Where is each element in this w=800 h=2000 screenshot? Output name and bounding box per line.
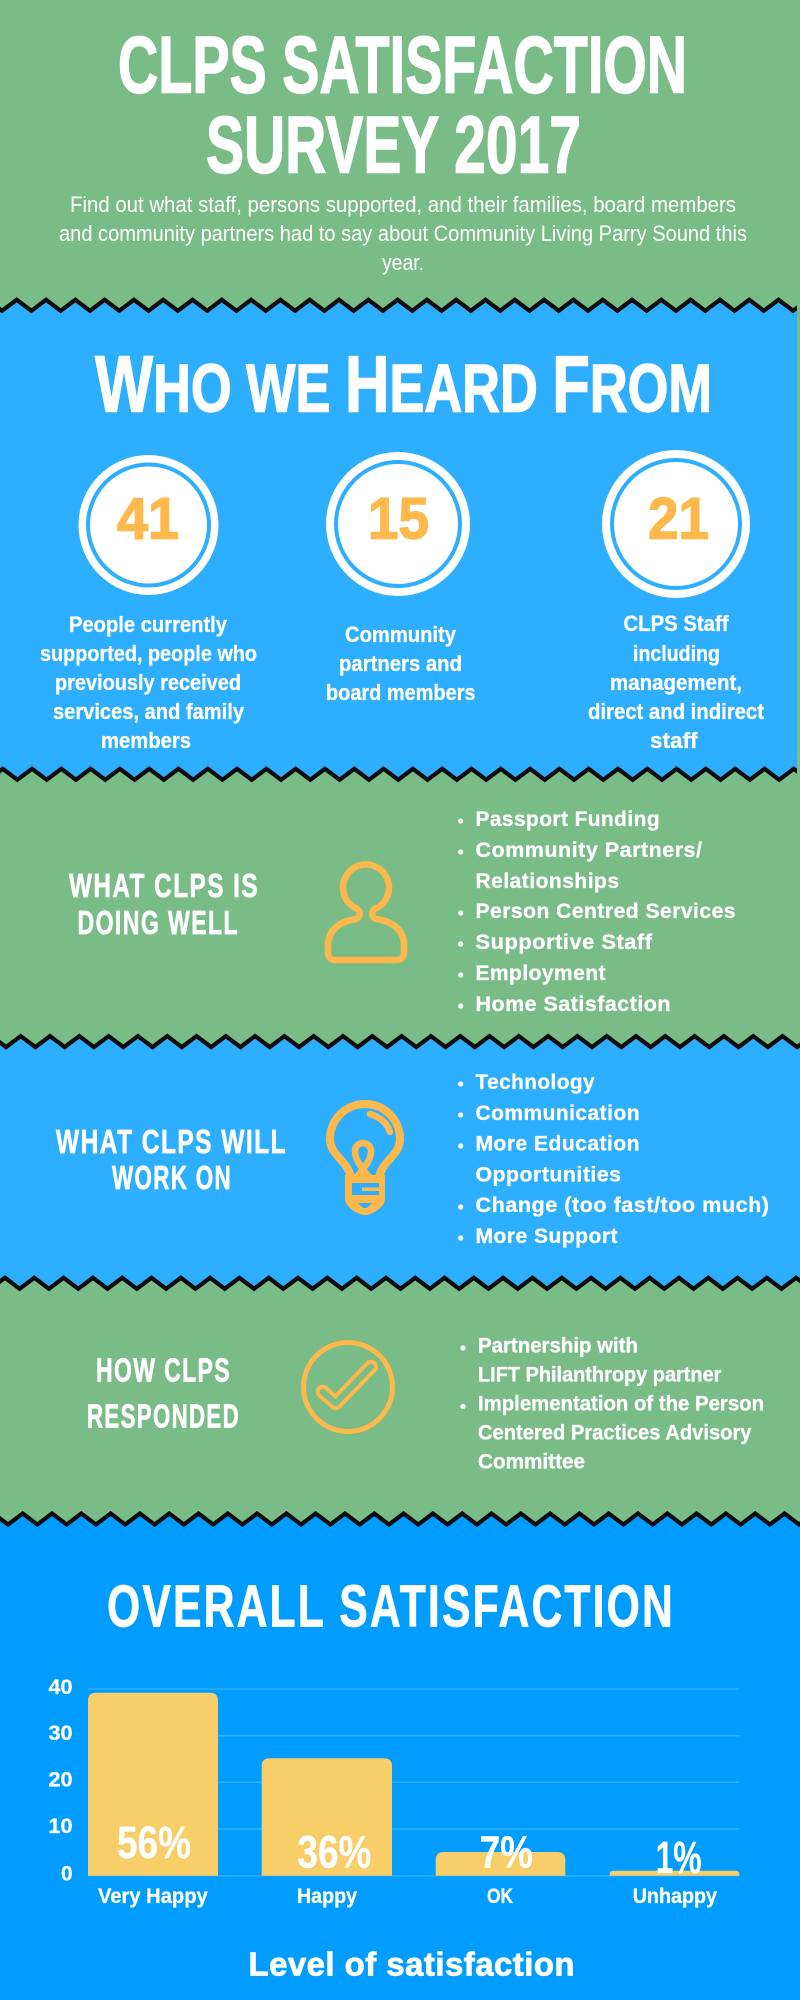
- icon: check mark: [304, 1342, 392, 1432]
- value: 56%: 56%: [117, 1817, 191, 1868]
- heading: how clps responded: RESPONDED: [87, 1398, 240, 1434]
- y axis labels: 0: [61, 1863, 72, 1886]
- stat: 21: 21: [648, 486, 709, 552]
- panel: who we heard from background: [0, 300, 800, 786]
- list: work on: More Support: [476, 1224, 618, 1248]
- stat caption: clps staff: management,: [610, 670, 742, 695]
- icon: person: [328, 865, 404, 960]
- list: responded: Implementation of the Person: [478, 1392, 764, 1416]
- stat caption: community partners: Community: [345, 622, 457, 647]
- stat: 41: 41: [117, 486, 179, 552]
- stat caption: community partners: board members: [326, 680, 476, 705]
- stat caption: clps staff: staff: [650, 728, 698, 753]
- list: work on: Technology: [476, 1070, 595, 1094]
- category labels: Very Happy: [98, 1885, 208, 1908]
- category labels: OK: [487, 1885, 513, 1908]
- list: doing well: Employment: [476, 961, 606, 985]
- intro text: and community partners had to say about Community Living Parry Sound this: [59, 221, 747, 246]
- list: work on: [458, 1070, 770, 1248]
- category labels: [98, 1885, 717, 1908]
- heading: what clps will work on: [56, 1123, 287, 1196]
- stat: 41: [78, 455, 218, 595]
- category labels: Unhappy: [633, 1885, 717, 1908]
- stat caption: people supported: members: [101, 728, 191, 753]
- bar: happy: [262, 1758, 392, 1876]
- stat caption: clps staff: CLPS Staff: [624, 611, 729, 636]
- category labels: Happy: [297, 1885, 357, 1908]
- list: doing well: Relationships: [476, 869, 620, 893]
- list: work on: Change (too fast/too much): [476, 1193, 770, 1217]
- list: responded: [460, 1334, 764, 1474]
- bar chart: [48, 1676, 739, 1908]
- stat: 15: 15: [368, 486, 429, 552]
- list: responded: LIFT Philanthropy partner: [478, 1363, 722, 1387]
- stat caption: clps staff: direct and indirect: [588, 699, 765, 724]
- heading: what clps will work on: WORK ON: [112, 1159, 232, 1196]
- stat caption: people supported: previously received: [55, 670, 241, 695]
- y axis labels: 20: [48, 1769, 72, 1792]
- stat caption: community partners: partners and: [339, 651, 462, 676]
- panel: work on background: [0, 1036, 800, 1523]
- heading: who we heard from: WHO WE HEARD FROM: [95, 340, 712, 428]
- list: doing well: Passport Funding: [476, 807, 660, 831]
- panel: responded background: [0, 1278, 800, 1764]
- heading: how clps responded: [87, 1352, 240, 1434]
- panel: doing well background: [0, 769, 800, 1255]
- intro text: year.: [382, 250, 424, 275]
- list: doing well: Community Partners/: [476, 838, 702, 862]
- list: responded: Partnership with: [478, 1334, 638, 1358]
- stat caption: clps staff: [588, 611, 765, 753]
- y axis labels: 10: [48, 1815, 72, 1838]
- heading: what clps is doing well: [69, 867, 259, 941]
- panel: overall satisfaction background: [0, 1514, 800, 2000]
- heading: what clps will work on: WHAT CLPS WILL: [56, 1123, 287, 1160]
- heading: what clps is doing well: WHAT CLPS IS: [69, 867, 259, 904]
- intro text: [59, 192, 747, 275]
- list: work on: Opportunities: [476, 1163, 622, 1187]
- intro text: Find out what staff, persons supported, and their families, board members: [70, 192, 736, 217]
- heading: how clps responded: HOW CLPS: [96, 1352, 231, 1388]
- value: 7%: 7%: [480, 1826, 533, 1878]
- stat caption: people supported: People currently: [69, 612, 228, 637]
- value: 1%: 1%: [656, 1832, 702, 1883]
- stat caption: community partners: [326, 622, 476, 705]
- y axis labels: [48, 1676, 72, 1886]
- icon: light bulb: [330, 1104, 400, 1215]
- stat caption: people supported: [40, 612, 257, 753]
- stat caption: people supported: supported, people who: [40, 641, 257, 666]
- axis title: level of satisfaction: Level of satisfaction: [248, 1946, 575, 1983]
- stat caption: clps staff: including: [633, 641, 720, 666]
- list: responded: Centered Practices Advisory: [478, 1421, 752, 1445]
- list: work on: Communication: [476, 1101, 640, 1125]
- stat: 15: [326, 452, 470, 596]
- title: [118, 20, 687, 190]
- bar: ok: [436, 1852, 565, 1876]
- list: doing well: Home Satisfaction: [476, 992, 671, 1016]
- bar: unhappy: [610, 1871, 739, 1876]
- heading: what clps is doing well: DOING WELL: [78, 904, 239, 941]
- y axis labels: 40: [48, 1676, 72, 1699]
- stat caption: people supported: services, and family: [53, 699, 245, 724]
- list: work on: More Education: [476, 1132, 640, 1156]
- stat: 21: [602, 450, 750, 598]
- value: 36%: 36%: [297, 1826, 371, 1878]
- title: SURVEY 2017: [206, 100, 581, 190]
- bar: very happy: [88, 1693, 218, 1876]
- y axis labels: 30: [48, 1722, 72, 1745]
- list: responded: Committee: [478, 1450, 585, 1474]
- list: doing well: Supportive Staff: [476, 930, 653, 954]
- list: doing well: [458, 807, 736, 1016]
- list: doing well: Person Centred Services: [476, 899, 736, 923]
